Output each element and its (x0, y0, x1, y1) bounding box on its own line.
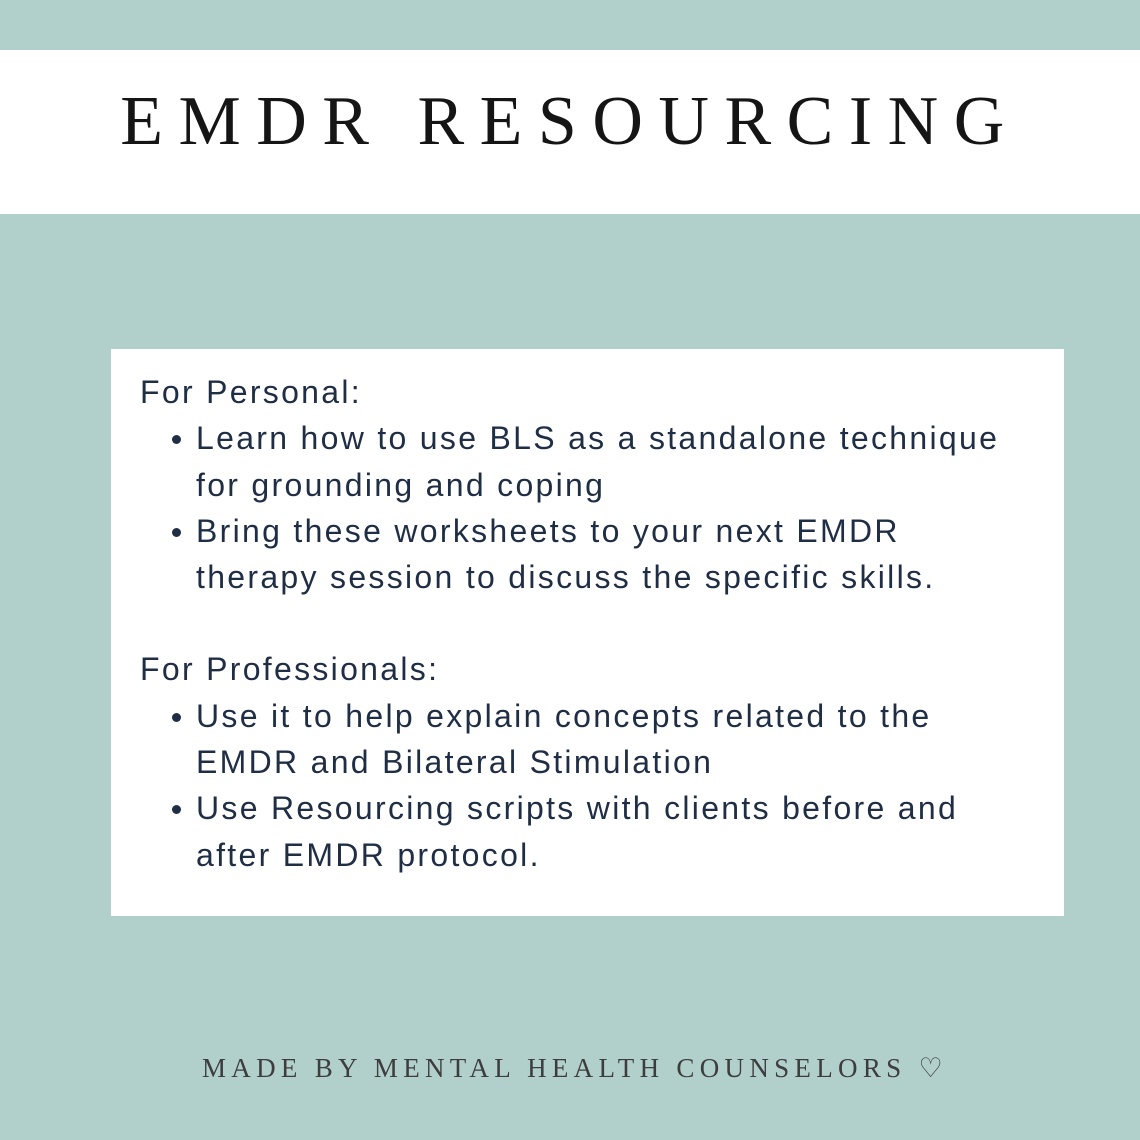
text block: usage list: For Professionals: (140, 651, 439, 687)
text block: usage list: therapy session to discuss the specific skills. (196, 559, 935, 595)
footer credit: MADE BY MENTAL HEALTH COUNSELORS ♡ (202, 1053, 948, 1083)
text block: usage list: For Personal: (140, 374, 362, 410)
text block: usage list: Learn how to use BLS as a standalone technique (196, 420, 999, 456)
text block: usage list: after EMDR protocol. (196, 837, 541, 873)
title: EMDR RESOURCING (120, 83, 1020, 160)
text block: usage list: Use Resourcing scripts with clients before and (196, 790, 958, 826)
panel: usage card (111, 349, 1064, 916)
text block: usage list: Bring these worksheets to your next EMDR (196, 513, 900, 549)
text block: usage list: EMDR and Bilateral Stimulation (196, 744, 713, 780)
title band (0, 50, 1140, 214)
text block: usage list: Use it to help explain concepts related to the (196, 698, 932, 734)
text block: usage list: for grounding and coping (196, 467, 605, 503)
text block: usage list (140, 374, 999, 873)
